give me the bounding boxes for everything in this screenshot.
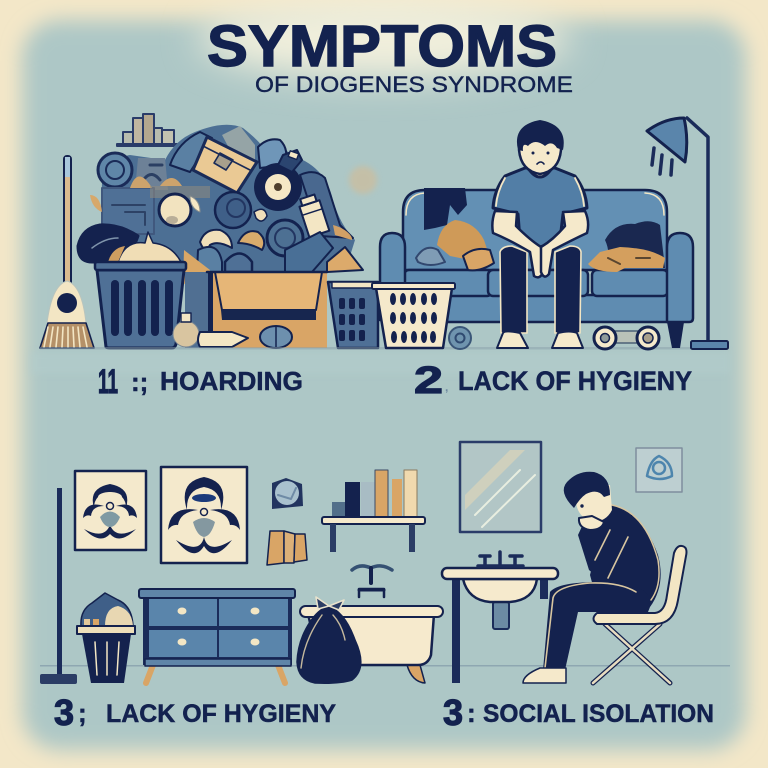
- person seated head in hand: [523, 472, 661, 683]
- garbage bag: [297, 597, 361, 683]
- title: SYMPTOMS: [207, 14, 557, 79]
- mirror: [460, 442, 541, 532]
- bottle neck: [278, 150, 302, 172]
- label: social isolation: :: [467, 698, 476, 728]
- cream bottle: [297, 194, 329, 237]
- neck and collar: [528, 160, 552, 177]
- tub faucet: [352, 566, 392, 597]
- clutter disc: [98, 153, 132, 187]
- label: lack of hygiene bottom: LACK OF HYGIENY: [106, 700, 336, 728]
- blue round: [215, 192, 251, 228]
- icon: lamp: [647, 118, 728, 349]
- label: lack of hygiene bottom: 3: [54, 692, 74, 733]
- label: social isolation: SOCIAL ISOLATION: [483, 700, 714, 728]
- arms: [492, 211, 543, 277]
- subtitle: OF DIOGENES SYNDROME: [255, 72, 573, 97]
- leg: [543, 582, 648, 670]
- back shelf with books: [117, 114, 177, 146]
- middle debris: [200, 230, 232, 249]
- panel: biohazard room: [40, 467, 443, 684]
- label: hoarding: HOARDING: [160, 366, 303, 396]
- head: [576, 485, 612, 522]
- label: social isolation: [443, 692, 714, 733]
- target disc: [254, 163, 302, 211]
- clothes on sofa: [416, 188, 665, 272]
- label: lack of hygiene top: [414, 360, 692, 402]
- pile of clutter: [90, 125, 355, 272]
- trash can with rubbish: [78, 225, 186, 348]
- panel: sofa scene: [372, 118, 728, 349]
- wall disc: [272, 478, 303, 509]
- dresser: [139, 589, 295, 683]
- floor line bottom: [40, 665, 730, 666]
- cardboard box: [185, 272, 327, 348]
- blue basket: [328, 282, 378, 348]
- dumbbell: [594, 327, 659, 349]
- orange books: [267, 531, 307, 565]
- icon: broom: [40, 156, 94, 348]
- label: hoarding: 11: [98, 363, 118, 401]
- floor stand: [40, 488, 77, 684]
- poster: small biohazard: [75, 471, 146, 550]
- torso: [590, 505, 661, 612]
- legs: [500, 246, 527, 333]
- bottom bottles: [173, 313, 292, 348]
- person sitting on sofa: [492, 120, 588, 348]
- dark blue crate: [102, 188, 154, 234]
- laundry basket: [372, 283, 455, 348]
- sofa: [380, 190, 693, 348]
- label: lack of hygiene bottom: [54, 692, 336, 733]
- bathtub: [300, 566, 443, 683]
- arm: [578, 515, 632, 579]
- poster: large biohazard: [161, 467, 247, 563]
- label: lack of hygiene top: ,: [445, 380, 448, 394]
- label: lack of hygiene top: 2: [414, 360, 443, 402]
- wheel: [449, 327, 471, 349]
- box flaps: [183, 250, 210, 284]
- blue disc: [267, 220, 303, 256]
- small framed symbol: [636, 448, 682, 492]
- wall shelf with books: [322, 470, 425, 552]
- label: hoarding: :;: [131, 367, 148, 397]
- label: lack of hygiene top: LACK OF HYGIENY: [458, 366, 692, 396]
- tilted tan box: [193, 137, 257, 193]
- chair: [593, 546, 686, 683]
- label: lack of hygiene bottom: ;: [78, 698, 87, 728]
- sink: [442, 552, 558, 683]
- panel: hoarding: [40, 114, 700, 350]
- panel: social isolation: [442, 442, 686, 683]
- trash bin: [77, 593, 135, 683]
- label: hoarding: [98, 363, 303, 401]
- foot: [523, 668, 566, 683]
- cream globe: [159, 194, 191, 226]
- label: social isolation: 3: [443, 692, 463, 733]
- t-shirt: [493, 168, 587, 247]
- head: [519, 133, 561, 174]
- feet: [497, 332, 528, 348]
